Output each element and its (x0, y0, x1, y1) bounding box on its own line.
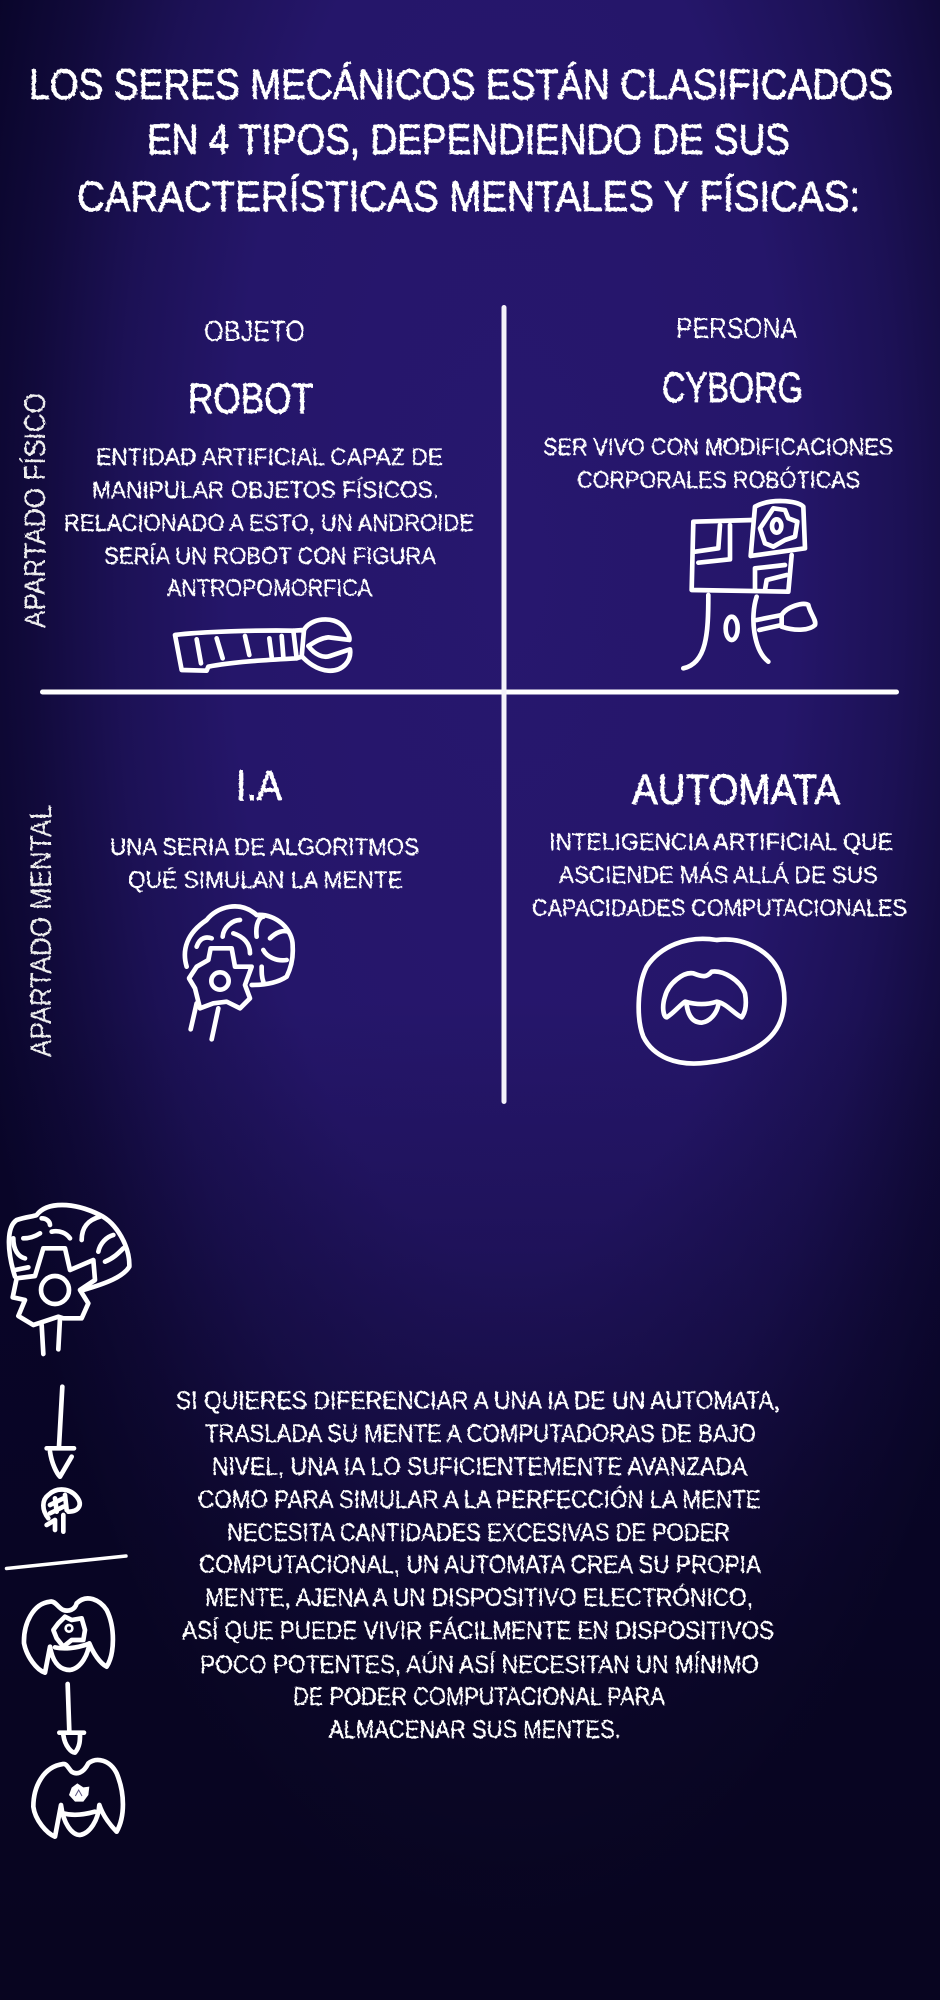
automata description: ASCIENDE MÁS ALLÁ DE SUS (559, 862, 878, 889)
cyborg description: SER VIVO CON MODIFICACIONES (543, 434, 893, 461)
IA description: QUÉ SIMULAN LA MENTE (128, 867, 403, 894)
title: CARACTERÍSTICAS MENTALES Y FÍSICAS: (77, 173, 860, 221)
panel: automata (532, 766, 907, 1064)
horizontal axis line (40, 690, 899, 694)
title: EN 4 TIPOS, DEPENDIENDO DE SUS (147, 116, 790, 164)
divider line (6, 1556, 126, 1568)
explanatory paragraph: COMPUTACIONAL, UN AUTOMATA CREA SU PROPIA (199, 1551, 761, 1579)
explanatory paragraph: ASÍ QUE PUEDE VIVIR FÁCILMENTE EN DISPOSITIVOS (182, 1616, 774, 1645)
icon: cyborg (683, 501, 815, 668)
robot description: SERÍA UN ROBOT CON FIGURA (104, 543, 436, 570)
icon: automata with small gear (33, 1760, 123, 1837)
arrow: down to tiny brain (47, 1387, 74, 1477)
explanatory paragraph: ALMACENAR SUS MENTES. (329, 1716, 621, 1744)
explanatory paragraph: SI QUIERES DIFERENCIAR A UNA IA DE UN AUTOMATA, (176, 1387, 780, 1415)
explanatory paragraph: COMO PARA SIMULAR A LA PERFECCIÓN LA MENTE (198, 1485, 761, 1514)
heading: I.A: I.A (236, 762, 282, 810)
automata description: INTELIGENCIA ARTIFICIAL QUE (549, 829, 893, 856)
explanatory paragraph: TRASLADA SU MENTE A COMPUTADORAS DE BAJO (205, 1420, 756, 1448)
robot description: RELACIONADO A ESTO, UN ANDROIDE (64, 510, 474, 537)
arrow: down to automata (59, 1684, 84, 1753)
robot description (64, 444, 474, 602)
axis label: apartado mental: APARTADO MENTAL (25, 805, 58, 1057)
icon: automata mask in circle (639, 939, 784, 1064)
column label: persona: PERSONA (676, 313, 798, 345)
icon: tiny brain (43, 1490, 80, 1532)
panel: robot (64, 316, 474, 671)
IA description (110, 834, 419, 894)
vertical axis line (502, 305, 506, 1104)
cyborg description (543, 434, 893, 494)
explanatory paragraph: NIVEL, UNA IA LO SUFICIENTEMENTE AVANZADA (212, 1453, 747, 1481)
automata description (532, 829, 907, 922)
panel: cyborg (543, 313, 893, 668)
robot description: MANIPULAR OBJETOS FÍSICOS. (92, 477, 439, 504)
explanatory paragraph: POCO POTENTES, AÚN ASÍ NECESITAN UN MÍNIMO (200, 1650, 759, 1679)
icon: large brain (9, 1205, 129, 1354)
heading: cyborg: CYBORG (662, 364, 803, 412)
robot description: ANTROPOMORFICA (167, 575, 372, 602)
icon: brain with gear (185, 906, 293, 1039)
robot description: ENTIDAD ARTIFICIAL CAPAZ DE (96, 444, 443, 471)
automata description: CAPACIDADES COMPUTACIONALES (532, 895, 907, 922)
cyborg description: CORPORALES ROBÓTICAS (577, 467, 860, 494)
explanatory paragraph: NECESITA CANTIDADES EXCESIVAS DE PODER (227, 1519, 730, 1547)
IA description: UNA SERIA DE ALGORITMOS (110, 834, 419, 861)
title (29, 61, 893, 221)
panel: IA (110, 762, 419, 1039)
icon: robot arm (175, 619, 350, 671)
explanatory paragraph: DE PODER COMPUTACIONAL PARA (293, 1683, 665, 1711)
column label: objeto: OBJETO (204, 316, 305, 348)
explanatory paragraph: MENTE, AJENA A UN DISPOSITIVO ELECTRÓNICO, (205, 1583, 753, 1612)
heading: automata: AUTOMATA (632, 766, 840, 814)
explanatory paragraph (176, 1387, 780, 1744)
axis label: apartado físico: APARTADO FÍSICO (19, 393, 52, 628)
heading: robot: ROBOT (188, 375, 313, 423)
comparison diagram: IA vs automata (6, 1205, 129, 1837)
icon: automata with gear (24, 1598, 113, 1673)
